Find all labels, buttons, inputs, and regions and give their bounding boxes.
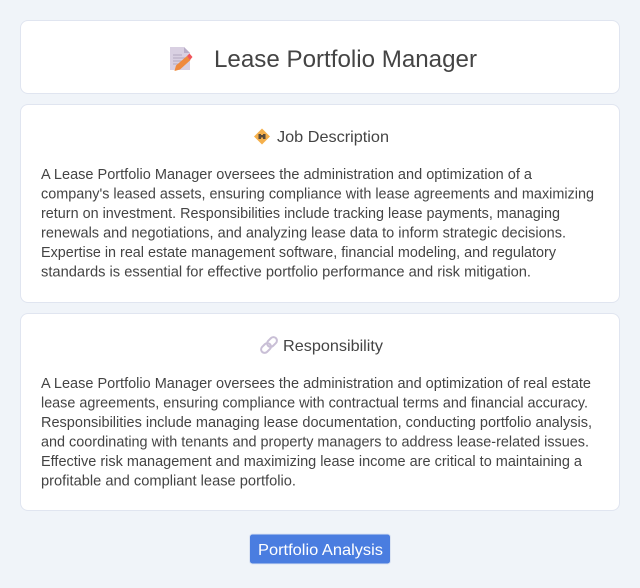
job description text [41, 167, 594, 280]
responsibility text: and coordinating with tenants and property managers to address lease-related issues. [41, 434, 589, 450]
heading: job description: Job Description [277, 129, 389, 146]
job description text: standards is essential for effective portfolio performance and risk mitigation. [41, 264, 531, 280]
job description text: Expertise in real estate management software, financial modeling, and regulatory [41, 245, 557, 261]
responsibility text: Responsibilities include managing lease documentation, conducting portfolio analysis, [41, 415, 592, 431]
responsibility text: lease agreements, ensuring compliance with contractual terms and financial accuracy. [41, 396, 588, 412]
responsibility text: A Lease Portfolio Manager oversees the administration and optimization of real estate [41, 376, 591, 392]
responsibility text [41, 376, 592, 490]
header card [20, 20, 620, 94]
job description text: renewals and negotiations, and analyzing lease data to inform strategic decisions. [41, 226, 566, 242]
panel: job description [20, 104, 620, 303]
job description text: A Lease Portfolio Manager oversees the administration and optimization of a [41, 167, 533, 183]
responsibility text: Effective risk management and maximizing lease income are critical to maintaining a [41, 454, 583, 470]
panel: responsibility [20, 313, 620, 511]
icon: chain link [260, 336, 278, 354]
button: portfolio analysis: Portfolio Analysis [258, 542, 383, 559]
heading: responsibility: Responsibility [283, 338, 383, 355]
title: Lease Portfolio Manager [214, 46, 477, 73]
button: portfolio analysis [250, 534, 390, 564]
job description text: company's leased assets, ensuring compliance with lease agreements and maximizing [41, 186, 594, 202]
job description text: return on investment. Responsibilities include tracking lease payments, managing [41, 206, 560, 222]
responsibility text: profitable and compliant lease portfolio. [41, 474, 296, 490]
icon: diamond sign [254, 128, 270, 144]
icon: document with pencil [170, 47, 192, 71]
